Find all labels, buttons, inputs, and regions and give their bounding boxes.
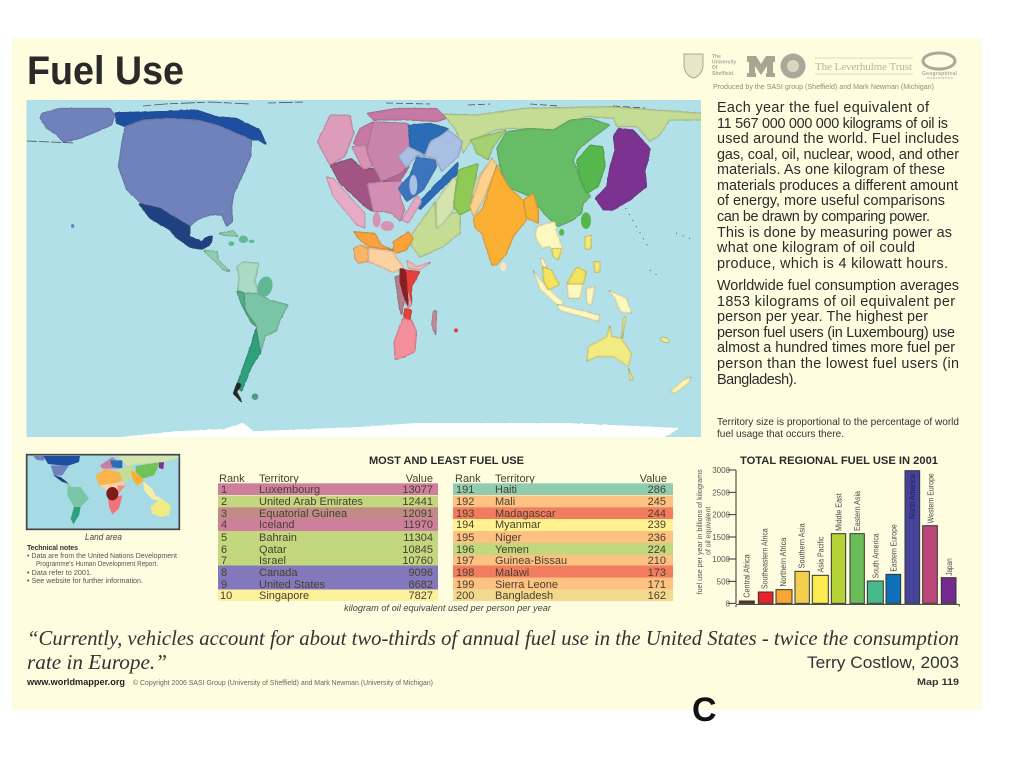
table: most fuel use: Iceland xyxy=(259,519,294,531)
Central America xyxy=(203,250,230,272)
table: least fuel use: Territory xyxy=(495,473,535,485)
inset Central Asia xyxy=(119,465,134,484)
table: most fuel use: 8 xyxy=(221,567,227,579)
logo: University of Sheffield: Of xyxy=(712,65,718,71)
table: least fuel use: 245 xyxy=(648,496,666,508)
bar labels: Eastern Asia xyxy=(853,491,862,531)
table: most fuel use: 9096 xyxy=(409,567,433,579)
inset Southeast Asia xyxy=(143,481,166,501)
table: most fuel use: Canada xyxy=(259,567,298,579)
logo: University of Sheffield xyxy=(684,54,736,78)
description text: This is done by measuring power as xyxy=(717,225,952,241)
quotation: “Currently, vehicles account for about two-thirds of annual fuel use in the United States - twice the consumption xyxy=(27,626,959,650)
description text: what one kilogram of oil could xyxy=(716,240,915,256)
axis values: 0 xyxy=(726,599,731,608)
Baltic strip xyxy=(367,108,447,122)
bar chart xyxy=(695,466,959,608)
Mozambique xyxy=(403,308,412,320)
table: least fuel use: 191 xyxy=(456,484,474,496)
Germany and central Europe xyxy=(367,122,410,182)
copyright: © Copyright 2006 SASI Group (University of Sheffield) and Mark Newman (University of Michigan) xyxy=(133,678,433,687)
ocean xyxy=(26,100,701,437)
bar labels: Southern Asia xyxy=(798,523,807,568)
table caption: kilogram of oil equivalent used per person per year xyxy=(344,603,552,614)
table: most fuel use: 1 xyxy=(221,484,227,496)
bar labels: North America xyxy=(908,474,917,519)
table: least fuel use: 196 xyxy=(456,544,474,556)
partner logos xyxy=(684,53,958,91)
Europe and Middle East xyxy=(317,107,703,257)
description text: of energy, more useful comparisons xyxy=(717,193,945,209)
technical notes: • Data are from the United Nations Development xyxy=(27,553,177,560)
description text: Each year the fuel equivalent of xyxy=(717,100,930,116)
description text: person than the lowest fuel users (in xyxy=(717,356,959,372)
map note: Territory size is proportional to the percentage of world xyxy=(717,416,959,428)
description text: materials produces a different amount xyxy=(717,178,958,194)
Africa xyxy=(353,232,458,360)
logo: Geographical Association xyxy=(922,53,958,80)
table: most fuel use: 12091 xyxy=(402,508,433,520)
Alaska xyxy=(40,108,115,142)
Antarctica west xyxy=(122,423,358,437)
table: most fuel use: 11970 xyxy=(403,519,433,531)
axis values: 1000 xyxy=(712,555,731,564)
table: most fuel use: 6 xyxy=(221,544,227,556)
Southern Africa xyxy=(394,318,417,360)
Tasmania xyxy=(628,367,633,381)
table: most fuel use xyxy=(218,473,438,602)
table: most fuel use: Luxembourg xyxy=(259,484,320,496)
inset West Africa xyxy=(99,482,124,490)
Horn of Africa xyxy=(407,260,432,270)
axes xyxy=(727,470,959,607)
table: least fuel use: 224 xyxy=(648,544,666,556)
map note: fuel usage that occurs there. xyxy=(717,428,844,440)
table: most fuel use: Value xyxy=(406,473,433,485)
Hawaii xyxy=(71,224,74,228)
inset Congo xyxy=(106,487,118,500)
Asia and Oceania xyxy=(347,118,692,440)
chart heading: TOTAL REGIONAL FUEL USE IN 2001 xyxy=(740,455,938,467)
Saudi Arabia xyxy=(410,202,461,257)
Borneo south xyxy=(567,283,583,298)
table: most fuel use: 7827 xyxy=(409,590,433,602)
Australia xyxy=(587,317,632,367)
table: most fuel use: 11304 xyxy=(403,532,433,544)
New Guinea xyxy=(608,290,632,313)
axis title: fuel use per year in billions of kilograms xyxy=(695,469,704,594)
USA xyxy=(118,118,252,227)
inset North Africa xyxy=(96,469,122,485)
table: least fuel use: 194 xyxy=(456,519,474,531)
description text: Bangladesh). xyxy=(717,372,797,388)
Malaysia xyxy=(543,267,559,290)
Antarctica east xyxy=(347,423,678,440)
description text: 1853 kilograms of oil equivalent per xyxy=(717,294,955,310)
Mediterranean islands xyxy=(373,213,394,231)
bar labels: Southeastern Africa xyxy=(761,528,770,589)
inset Alaska xyxy=(33,456,45,461)
Colombia and Venezuela xyxy=(237,262,259,294)
logo: University of Sheffield: Sheffield. xyxy=(712,71,735,77)
inset Mexico xyxy=(53,475,69,484)
axis values xyxy=(712,466,731,608)
inset southern Africa xyxy=(108,495,122,514)
table: least fuel use xyxy=(453,473,673,602)
table: least fuel use: 193 xyxy=(456,508,474,520)
table: least fuel use: 200 xyxy=(456,590,474,602)
table: most fuel use: United Arab Emirates xyxy=(259,496,363,508)
table heading: MOST AND LEAST FUEL USE xyxy=(369,455,524,467)
Taiwan xyxy=(581,212,591,229)
table: least fuel use: 171 xyxy=(648,579,666,591)
bar labels: Western Europe xyxy=(926,473,935,523)
New Caledonia xyxy=(659,336,671,344)
logo: Geographical Association: Geographical xyxy=(922,71,958,77)
logo: University of Sheffield: The xyxy=(712,54,721,60)
inset Argentina xyxy=(71,507,81,524)
Iraq and Syria xyxy=(436,177,457,228)
table: least fuel use: Sierra Leone xyxy=(495,579,558,591)
Northeast India xyxy=(523,193,538,223)
table: least fuel use: 210 xyxy=(648,555,666,567)
Sri Lanka xyxy=(500,262,506,271)
table: least fuel use: 239 xyxy=(648,519,666,531)
logo: Michigan M xyxy=(747,56,775,77)
table: most fuel use: 8682 xyxy=(409,579,433,591)
Philippines north xyxy=(585,235,592,249)
table: least fuel use: Myanmar xyxy=(495,519,541,531)
Hainan xyxy=(559,229,564,236)
Spain xyxy=(326,177,365,228)
bar labels xyxy=(742,473,954,598)
Baltic states xyxy=(408,123,448,157)
table: most fuel use: Territory xyxy=(259,473,299,485)
Thailand and Indochina xyxy=(535,222,563,260)
map number: Map 119 xyxy=(917,677,959,687)
inset land area map xyxy=(27,455,179,529)
UK and Ireland xyxy=(317,115,354,165)
table: most fuel use: 10845 xyxy=(402,544,433,556)
quotation xyxy=(27,626,959,674)
logo: The Leverhulme Trust: The Leverhulme Trust xyxy=(815,61,912,73)
West Africa xyxy=(368,248,404,272)
Iran xyxy=(472,157,493,197)
Guianas xyxy=(258,276,273,297)
technical notes: Programme's Human Development Report. xyxy=(36,561,158,568)
Belarus xyxy=(409,175,417,195)
Scandinavia xyxy=(353,122,373,152)
Mongolia region xyxy=(470,130,507,160)
quotation: rate in Europe.” xyxy=(27,650,167,674)
inset Canada xyxy=(43,456,80,466)
East Africa xyxy=(405,270,420,305)
inset India xyxy=(131,470,144,486)
Norway xyxy=(352,145,372,170)
axis values: 3000 xyxy=(712,466,731,475)
table: least fuel use: 162 xyxy=(648,590,666,602)
table: most fuel use: 3 xyxy=(221,508,227,520)
table: most fuel use: 2 xyxy=(221,496,227,508)
arctic and pacific islands xyxy=(27,102,691,276)
title: Fuel Use xyxy=(27,49,184,93)
inset Japan xyxy=(159,462,164,469)
axis title xyxy=(695,469,713,594)
bar labels: South America xyxy=(871,533,880,578)
Caribbean xyxy=(228,236,255,246)
description text: Worldwide fuel consumption averages xyxy=(717,278,959,294)
Congo xyxy=(400,268,408,307)
slide letter: C xyxy=(692,691,717,729)
Korea xyxy=(577,145,605,193)
table: least fuel use: 197 xyxy=(456,555,474,567)
table: most fuel use: 4 xyxy=(221,519,227,531)
inset USA xyxy=(51,465,69,476)
table: least fuel use: Madagascar xyxy=(495,508,556,520)
Southeast Asia xyxy=(533,222,632,321)
Mauritius xyxy=(454,328,458,332)
Canada xyxy=(115,110,267,145)
North Africa xyxy=(353,232,413,253)
inset Australia xyxy=(151,499,171,517)
quotation attribution: Terry Costlow, 2003 xyxy=(807,653,959,672)
website: www.worldmapper.org xyxy=(26,677,125,687)
table: least fuel use: 199 xyxy=(456,579,474,591)
inset Central America xyxy=(65,483,74,489)
bar labels: Middle East xyxy=(835,493,844,531)
axis values: 2500 xyxy=(712,488,731,497)
table: most fuel use: Israel xyxy=(259,555,286,567)
table: least fuel use: Yemen xyxy=(495,544,529,556)
Ukraine xyxy=(398,157,437,202)
table: most fuel use: 7 xyxy=(221,555,227,567)
americas xyxy=(40,108,360,440)
west Russia xyxy=(398,130,463,172)
table: least fuel use: Value xyxy=(640,473,667,485)
table: most fuel use: United States xyxy=(259,579,326,591)
Japan xyxy=(595,128,650,210)
description text: used around the world. Fuel includes xyxy=(717,131,959,147)
description text xyxy=(716,100,959,388)
table: least fuel use: Niger xyxy=(495,532,522,544)
logo: round emblem xyxy=(780,54,806,78)
description text: person per year. The highest per xyxy=(717,309,928,325)
table: most fuel use: 5 xyxy=(221,532,227,544)
Morocco xyxy=(353,245,368,263)
Peru xyxy=(237,291,257,327)
logo: University of Sheffield: University xyxy=(712,60,736,66)
axis values: 500 xyxy=(717,577,731,586)
inset China xyxy=(136,462,161,479)
Chile and Argentina xyxy=(236,327,261,392)
table: least fuel use: 236 xyxy=(648,532,666,544)
table: least fuel use: 198 xyxy=(456,567,474,579)
China xyxy=(497,118,610,227)
table: least fuel use: Mali xyxy=(495,496,515,508)
Tierra del Fuego xyxy=(233,383,243,403)
table: least fuel use: Malawi xyxy=(495,567,529,579)
technical notes: • Data refer to 2001. xyxy=(27,570,92,577)
France xyxy=(330,158,382,212)
table: least fuel use: Haiti xyxy=(495,484,517,496)
Falklands xyxy=(252,393,258,400)
inset Horn of Africa xyxy=(117,485,126,495)
technical notes: Technical notes xyxy=(27,545,78,552)
Poland band xyxy=(382,165,410,182)
Tanzania xyxy=(403,282,412,308)
table: least fuel use: Rank xyxy=(455,473,481,485)
Sumatra xyxy=(533,270,564,307)
table: most fuel use: Singapore xyxy=(259,590,309,602)
table: most fuel use: 13077 xyxy=(402,484,433,496)
table: most fuel use: 10 xyxy=(220,590,232,602)
inset caption: Land area xyxy=(85,532,122,542)
table: most fuel use: Bahrain xyxy=(259,532,297,544)
technical notes: • See website for further information. xyxy=(27,578,143,585)
map note xyxy=(717,416,959,440)
bar labels: Eastern Europe xyxy=(890,524,899,572)
credit line: Produced by the SASI group (Sheffield) and Mark Newman (Michigan) xyxy=(713,84,934,91)
Sulawesi xyxy=(586,287,595,305)
Malay peninsula xyxy=(540,258,547,267)
India xyxy=(473,165,527,265)
description text: gas, coal, oil, nuclear, wood, and other xyxy=(717,147,959,163)
table: least fuel use: Bangladesh xyxy=(495,590,553,602)
table: most fuel use: 10760 xyxy=(402,555,433,567)
inset Europe xyxy=(100,457,119,469)
Central Africa xyxy=(395,275,405,316)
table: most fuel use: 9 xyxy=(221,579,227,591)
description text: person fuel users (in Luxembourg) use xyxy=(717,325,955,341)
bar labels: Japan xyxy=(945,558,954,576)
Central Asia xyxy=(453,163,478,215)
axis values: 1500 xyxy=(712,533,731,542)
bars xyxy=(739,471,956,603)
description text: can be drawn by comparing power. xyxy=(717,209,930,225)
Borneo north xyxy=(567,267,587,284)
Kazakhstan west xyxy=(417,162,458,210)
axis values: 2000 xyxy=(712,511,731,520)
bar labels: Asia Pacific xyxy=(816,537,825,572)
cartogram world map xyxy=(26,100,703,440)
table: most fuel use: Qatar xyxy=(259,544,287,556)
Italy and Balkans xyxy=(367,180,407,222)
description text: produce, which is 4 kilowatt hours. xyxy=(717,256,948,272)
logo: Geographical Association: Association xyxy=(927,75,953,80)
description text: materials. As one kilogram of these xyxy=(717,162,945,178)
table: most fuel use: Equatorial Guinea xyxy=(259,508,348,520)
axis title: of oil equivalent xyxy=(704,507,713,555)
Turkey xyxy=(402,195,422,223)
table: least fuel use: 286 xyxy=(648,484,666,496)
bar labels: Central Africa xyxy=(742,554,751,598)
table: least fuel use: 244 xyxy=(648,508,666,520)
bar labels: Northern Africa xyxy=(779,537,788,587)
inset South America xyxy=(67,487,89,507)
Mexico xyxy=(138,203,213,249)
inset Eastern Europe xyxy=(110,460,122,469)
table: least fuel use: 195 xyxy=(456,532,474,544)
Russia xyxy=(443,107,703,153)
New Zealand xyxy=(670,377,692,393)
technical notes xyxy=(27,545,177,585)
inset Russia xyxy=(117,456,179,466)
Philippines south xyxy=(593,262,600,272)
table: least fuel use: 173 xyxy=(648,567,666,579)
table: least fuel use: Guinea-Bissau xyxy=(495,555,567,567)
description text: 11 567 000 000 000 kilograms of oil is xyxy=(717,116,948,132)
description text: almost a hundred times more fuel per xyxy=(717,340,955,356)
table: most fuel use: 12441 xyxy=(402,496,433,508)
Cuba xyxy=(218,231,238,237)
Vietnam xyxy=(552,248,562,260)
Brazil xyxy=(243,293,288,355)
table: most fuel use: Rank xyxy=(219,473,245,485)
Pakistan xyxy=(470,158,497,217)
table: least fuel use: 192 xyxy=(456,496,474,508)
Madagascar xyxy=(432,311,437,336)
Java xyxy=(557,304,600,321)
